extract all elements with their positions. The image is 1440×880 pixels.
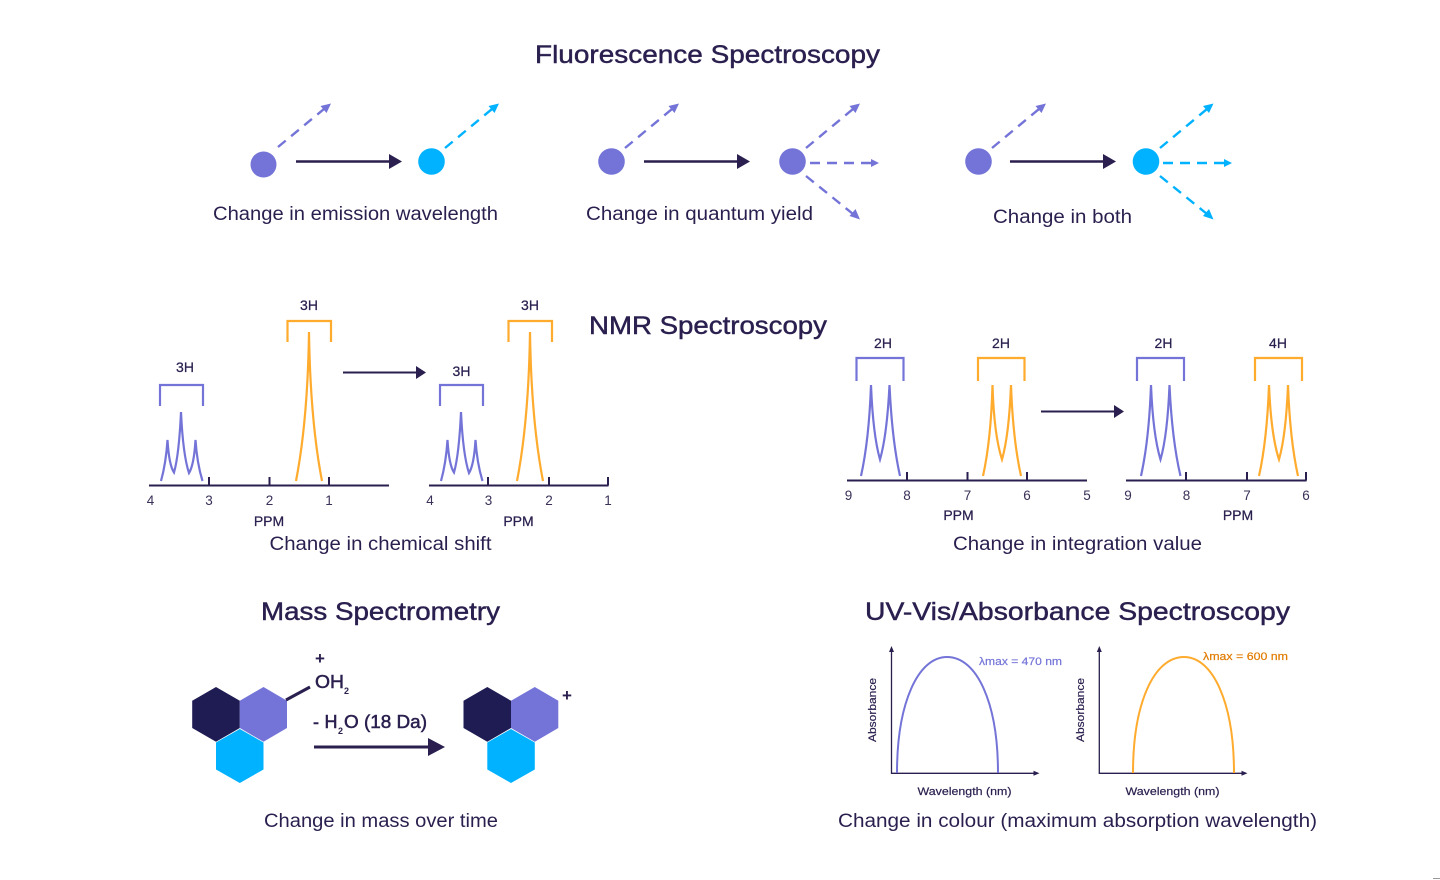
chart: spectrum before integration change: 6 [1023,488,1031,503]
icon: cyan emitter with dashed arrow [418,104,499,175]
chart: spectrum before integration change: 8 [903,488,911,503]
chart: absorbance at 470 nm: Absorbance [867,678,879,742]
chart: absorbance at 600 nm: Absorbance [1075,678,1087,742]
chart: spectrum before shift: 1 [325,493,333,508]
caption: emission wavelength: Change in emission wavelength [213,204,498,225]
chart: spectrum after integration change: 2H [1155,335,1172,351]
chart: spectrum after shift: 3 [485,493,492,508]
chart: spectrum before shift: 2 [266,493,273,508]
icon: hexagon cluster with OH2 group: + [315,649,325,668]
chart: spectrum after integration change: 7 [1243,488,1251,503]
arrow: shift transition [343,366,426,379]
label: water loss: O (18 Da) [344,712,427,732]
title: NMR Spectroscopy: NMR Spectroscopy [589,312,828,340]
caption: quantum yield: Change in quantum yield [586,204,813,225]
icon: purple emitter with dashed arrow [250,104,331,178]
icon: purple emitter with single dashed arrow [965,104,1046,175]
caption: change in both: Change in both [993,207,1132,228]
chart: absorbance at 600 nm [1075,646,1288,798]
chart: spectrum after integration change: 6 [1302,488,1310,503]
arrow: transition [1010,154,1116,169]
icon: purple emitter with single dashed arrow [598,104,679,175]
chart: spectrum after integration change: 9 [1124,488,1132,503]
arrow: integration transition [1041,405,1124,418]
caption: change in colour: Change in colour (maximum absorption wavelength) [838,811,1317,832]
panel: change in colour [838,646,1317,832]
chart: absorbance at 600 nm: Wavelength (nm) [1126,786,1220,798]
chart: spectrum after shift [426,297,612,529]
icon: hexagon cluster cation: + [562,686,572,705]
chart: spectrum before integration change: 2H [874,335,892,351]
chart: spectrum after shift: PPM [503,513,534,529]
chart: spectrum before integration change [845,335,1091,523]
chart: spectrum after integration change: 4H [1269,335,1287,351]
arrow: transition [644,154,750,169]
icon: purple emitter with three dashed arrows [779,104,879,220]
chart: spectrum before integration change: 2H [992,335,1010,351]
chart: spectrum after shift: 1 [604,493,612,508]
panel: change in quantum yield [586,104,879,225]
chart: spectrum before integration change: 5 [1083,488,1091,503]
icon: hexagon cluster cation [464,686,572,783]
chart: spectrum before integration change: PPM [943,507,974,523]
title: Mass Spectrometry: Mass Spectrometry [261,598,501,626]
title: Fluorescence Spectroscopy: Fluorescence Spectroscopy [535,41,881,69]
chart: spectrum after shift: 3H [453,363,470,379]
caption: chemical shift: Change in chemical shift [270,534,492,555]
chart: spectrum before shift: 3 [205,493,213,508]
title: UV-Vis/Absorbance Spectroscopy: UV-Vis/Absorbance Spectroscopy [865,598,1291,626]
chart: spectrum after integration change [1124,335,1310,523]
caption: mass over time: Change in mass over time [264,811,498,832]
label: water loss: - [313,712,319,732]
label: water loss: H [324,712,338,732]
caption: integration value: Change in integration value [953,534,1202,555]
arrow: transition [296,154,402,169]
icon: hexagon cluster with OH2 group: OH [315,672,344,692]
chart: absorbance at 600 nm: λmax = 600 nm [1203,651,1288,663]
chart: spectrum before shift [147,297,389,529]
chart: absorbance at 470 nm [867,646,1062,798]
label: water loss: 2 [338,726,343,736]
panel: change in both [965,104,1232,228]
icon: cyan emitter with three dashed arrows [1133,104,1232,220]
panel: change in emission wavelength [213,104,499,225]
panel: change in chemical shift [147,297,612,555]
chart: spectrum before integration change: 9 [845,488,852,503]
label: water loss [313,712,427,736]
icon: hexagon cluster with OH2 group: 2 [344,686,349,696]
chart: spectrum before integration change: 7 [964,488,971,503]
chart: absorbance at 470 nm: λmax = 470 nm [979,656,1062,668]
chart: spectrum after shift: 2 [545,493,553,508]
chart: spectrum after integration change: 8 [1183,488,1190,503]
chart: absorbance at 470 nm: Wavelength (nm) [918,786,1012,798]
chart: spectrum after integration change: PPM [1223,507,1253,523]
arrow: mass loss [314,738,445,756]
chart: spectrum before shift: 3H [176,359,194,375]
icon: hexagon cluster with OH2 group [192,649,349,783]
chart: spectrum before shift: 3H [300,297,318,313]
panel: change in integration value [845,335,1310,555]
chart: spectrum after shift: 3H [521,297,539,313]
chart: spectrum before shift: 4 [147,493,155,508]
chart: spectrum after shift: 4 [426,493,434,508]
chart: spectrum before shift: PPM [254,513,284,529]
panel: change in mass over time [192,649,572,832]
